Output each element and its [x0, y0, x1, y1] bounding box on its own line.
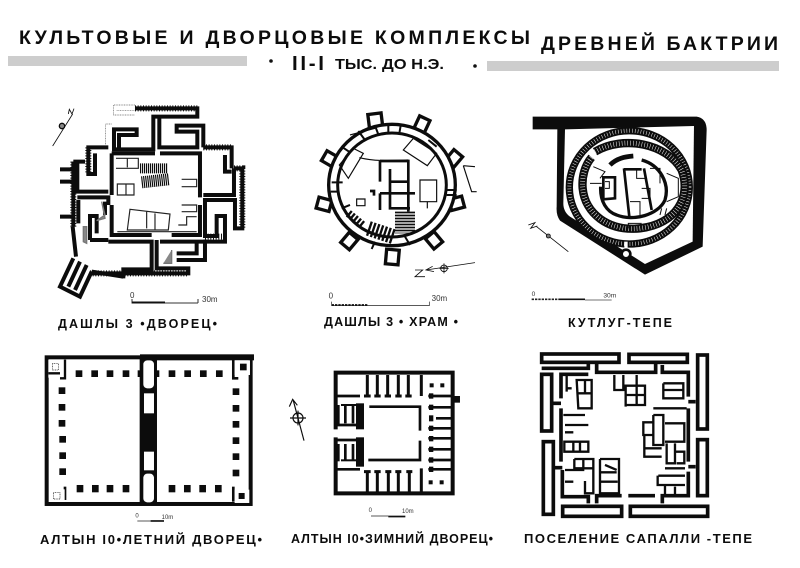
inner citadel wall [601, 160, 666, 218]
icon: north arrow [415, 263, 475, 277]
scale bar: 0 [329, 291, 334, 300]
central wall block [140, 359, 157, 502]
second hatched ring [582, 143, 685, 229]
inner square walls [542, 364, 696, 503]
scale bar [329, 291, 448, 306]
stair hatching [348, 212, 405, 237]
outer hatched ring [569, 131, 689, 244]
central building [370, 161, 415, 212]
plan: Dashly 3 palace [53, 105, 242, 297]
towers [316, 113, 465, 265]
plan: Dashly 3 temple [316, 113, 477, 306]
grey bar left [8, 56, 247, 66]
ring cross walls [331, 125, 457, 249]
plan: Altyn 10 winter palace [289, 373, 460, 517]
internal rooms [116, 158, 197, 232]
enclosure interior [563, 126, 694, 264]
scale bar: 0 [369, 508, 373, 514]
dwellings: top centre [614, 375, 645, 407]
icon: north arrow [528, 223, 568, 252]
icon: north arrow [289, 399, 306, 441]
plan: Kutlug-Tepe [528, 117, 707, 300]
grey bar right [487, 61, 779, 71]
palace wall serration [73, 108, 242, 273]
bullet right [473, 64, 477, 68]
dwellings: lower left [564, 442, 619, 493]
scale bar: palace [130, 291, 218, 304]
scale bar: 30m [432, 294, 448, 303]
outer walls [47, 357, 251, 504]
label: Kutlug-Tepe: КУТЛУГ-ТЕПЕ [568, 316, 672, 330]
arc wall [610, 156, 633, 165]
subtitle: BC: ДО Н.Э. [382, 56, 444, 73]
dwellings: right block [643, 383, 687, 463]
label: Dashly temple: ДАШЛЫ 3 • ХРАМ • [324, 315, 458, 329]
scale bar: 0 [135, 514, 139, 520]
scale bar: 30m [603, 292, 617, 299]
icon: north arrow [53, 109, 74, 146]
dwellings: upper left [563, 376, 592, 432]
long perimeter rooms [542, 354, 708, 516]
subtitle: century numerals: II-I [292, 52, 324, 75]
scale bar [532, 291, 617, 300]
label: Dashly palace: ДАШЛЫ 3 •ДВОРЕЦ• [58, 317, 217, 331]
grey hatched area [83, 202, 172, 263]
plan: Altyn 10 summer palace [47, 354, 254, 521]
temple thin walls [339, 128, 477, 208]
citadel rooms [590, 167, 678, 228]
title: first part: КУЛЬТОВЫЕ И ДВОРЦОВЫЕ КОМПЛЕКСЫ [19, 27, 530, 49]
outer walls [336, 373, 453, 493]
subtitle: thousand years: ТЫС. [335, 56, 377, 73]
scale bar: 0 [532, 291, 536, 298]
label: Sapalli-Tepe: ПОСЕЛЕНИЕ САПАЛЛИ -ТЕПЕ [524, 531, 752, 546]
plan: Sapalli-Tepe settlement [542, 354, 708, 516]
label: Altyn winter palace: АЛТЫН I0•ЗИМНИЙ ДВОРЕЦ• [291, 531, 493, 546]
dashed outer wall traces [106, 105, 135, 145]
title: second part: ДРЕВНЕЙ БАКТРИИ [541, 31, 778, 55]
palace walls [60, 108, 242, 297]
inner court [337, 396, 420, 469]
scale bar: 10m [162, 515, 173, 521]
staircase hatching [140, 168, 169, 182]
scale bar [369, 508, 414, 517]
corner rooms [48, 360, 250, 503]
citadel buildings [603, 168, 652, 217]
gate [621, 242, 631, 254]
label: Altyn summer palace: АЛТЫН I0•ЛЕТНИЙ ДВОРЕЦ• [40, 532, 262, 547]
outer enclosure [533, 117, 707, 275]
scale bar [135, 514, 173, 521]
top band [140, 354, 254, 360]
scale bar: palace: 0 [130, 291, 135, 300]
dwellings: lower right [658, 468, 685, 494]
comb rooms bottom [364, 468, 421, 492]
pillars [59, 370, 239, 492]
header [8, 27, 779, 75]
scale bar: palace: 30m [202, 295, 218, 304]
right column dots [429, 383, 444, 484]
comb rooms top [364, 375, 421, 396]
right hand rooms [428, 396, 454, 469]
black blocks [337, 396, 460, 467]
circular walls [329, 124, 455, 246]
scale bar: 10m [402, 509, 414, 515]
bullet left [269, 59, 273, 63]
